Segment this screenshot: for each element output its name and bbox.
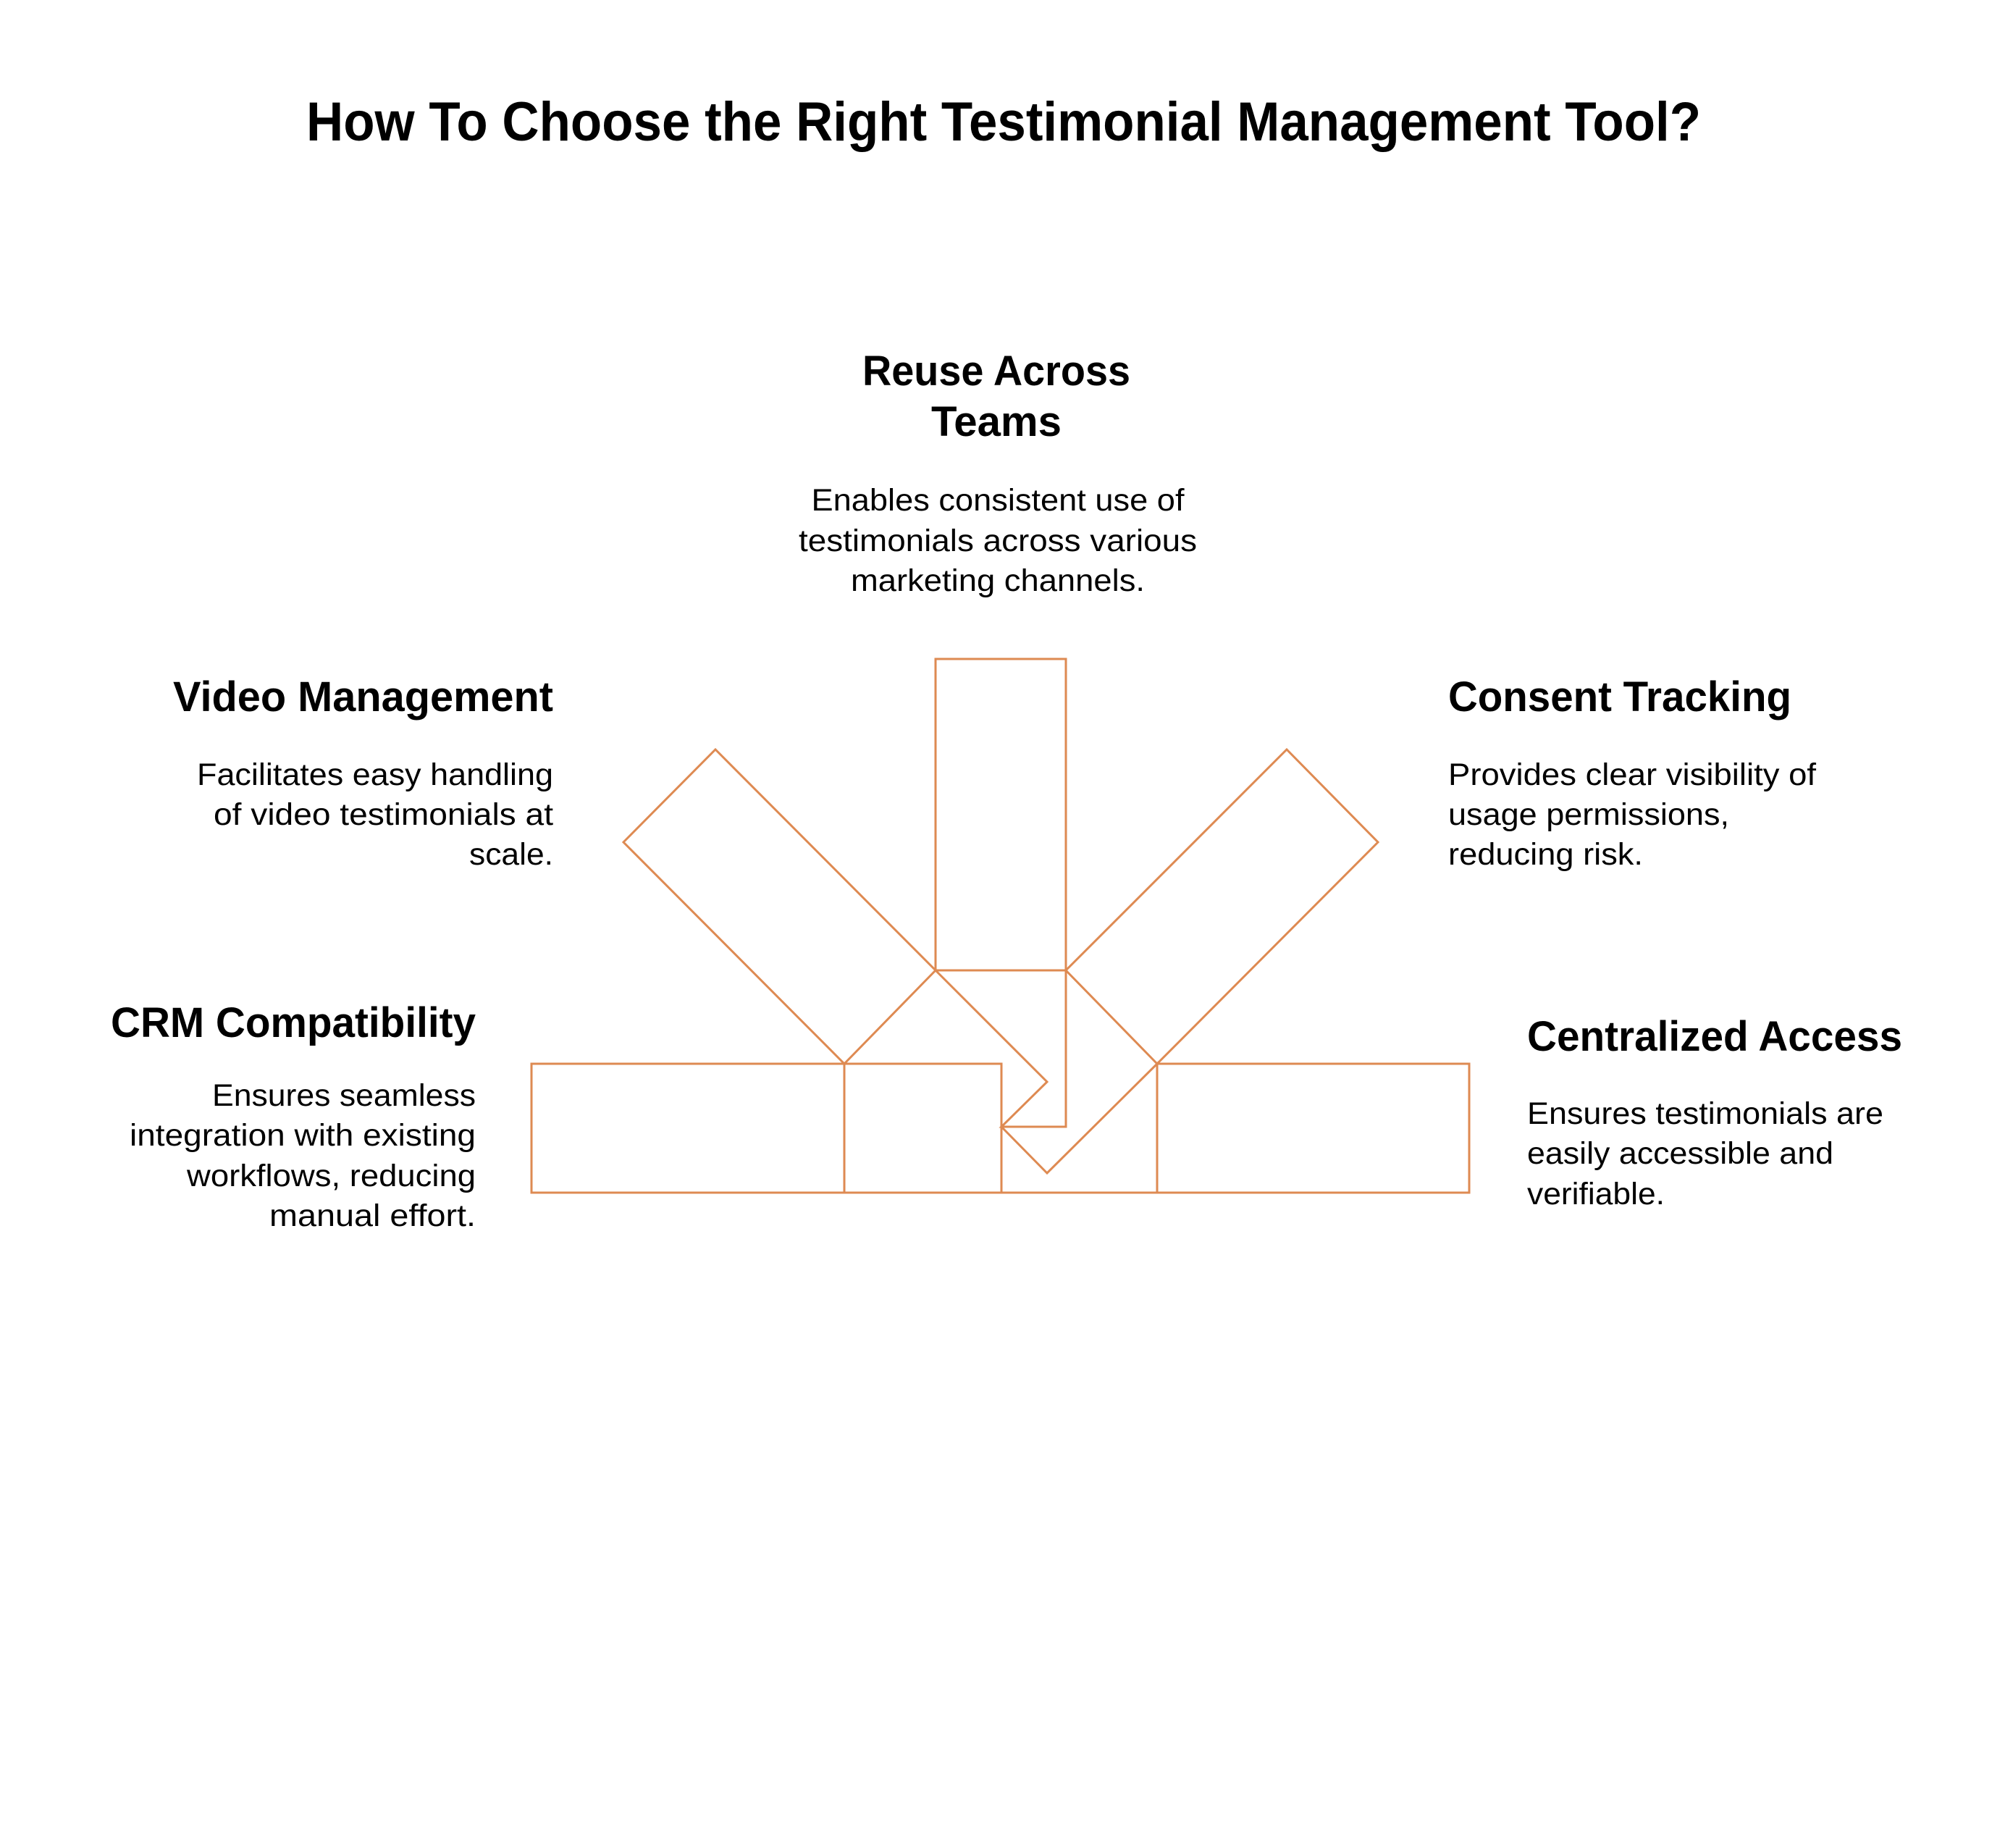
shape: bottom left rectangle (CRM Compatibility)	[531, 1064, 844, 1193]
block: Reuse Across Teams: Enables consistent use of	[811, 483, 1185, 518]
block: Reuse Across Teams: Reuse Across	[862, 348, 1130, 395]
block: Centralized Access: verifiable.	[1527, 1177, 1665, 1211]
block: CRM Compatibility: workflows, reducing	[186, 1159, 476, 1193]
block: Centralized Access: easily accessible and	[1527, 1136, 1833, 1171]
block: CRM Compatibility: manual effort.	[269, 1198, 476, 1233]
block: Reuse Across Teams: Teams	[931, 398, 1062, 445]
shape: vertical rectangle (Reuse Across Teams)	[936, 659, 1066, 970]
shape: bottom right rectangle (Centralized Access)	[1157, 1064, 1469, 1193]
shape: bottom left-center rectangle	[844, 1064, 1001, 1193]
block: Reuse Across Teams: testimonials across various	[799, 524, 1197, 558]
block: Video Management: Video Management	[173, 673, 553, 721]
shape: left tilted rectangle (Video Management)	[623, 749, 936, 1064]
block: Video Management: Facilitates easy handling	[197, 757, 553, 792]
block: Consent Tracking: reducing risk.	[1448, 837, 1643, 872]
block: Centralized Access	[1527, 1013, 1902, 1211]
block: Consent Tracking: usage permissions,	[1448, 797, 1729, 832]
block: CRM Compatibility	[111, 999, 476, 1233]
shape: bottom center V piece	[1001, 1064, 1157, 1193]
block: CRM Compatibility: CRM Compatibility	[111, 999, 476, 1046]
block: CRM Compatibility: integration with existing	[130, 1118, 476, 1153]
diagram: fan of rectangles	[531, 659, 1469, 1193]
block: Centralized Access: Ensures testimonials are	[1527, 1096, 1883, 1131]
block: Reuse Across Teams: marketing channels.	[851, 563, 1145, 598]
block: Consent Tracking	[1448, 673, 1817, 872]
block: Video Management: of video testimonials at	[214, 797, 553, 832]
block: Video Management	[173, 673, 553, 872]
block: Centralized Access: Centralized Access	[1527, 1013, 1902, 1060]
block: CRM Compatibility: Ensures seamless	[212, 1078, 476, 1113]
title: How To Choose the Right Testimonial Management Tool?	[306, 91, 1701, 153]
block: Video Management: scale.	[469, 837, 553, 872]
shape: center lower vertical piece	[936, 970, 1066, 1127]
shape: right tilted rectangle (Consent Tracking)	[1066, 749, 1378, 1064]
block: Consent Tracking: Provides clear visibility of	[1448, 757, 1817, 792]
block: Reuse Across Teams	[799, 348, 1197, 598]
block: Consent Tracking: Consent Tracking	[1448, 673, 1791, 721]
